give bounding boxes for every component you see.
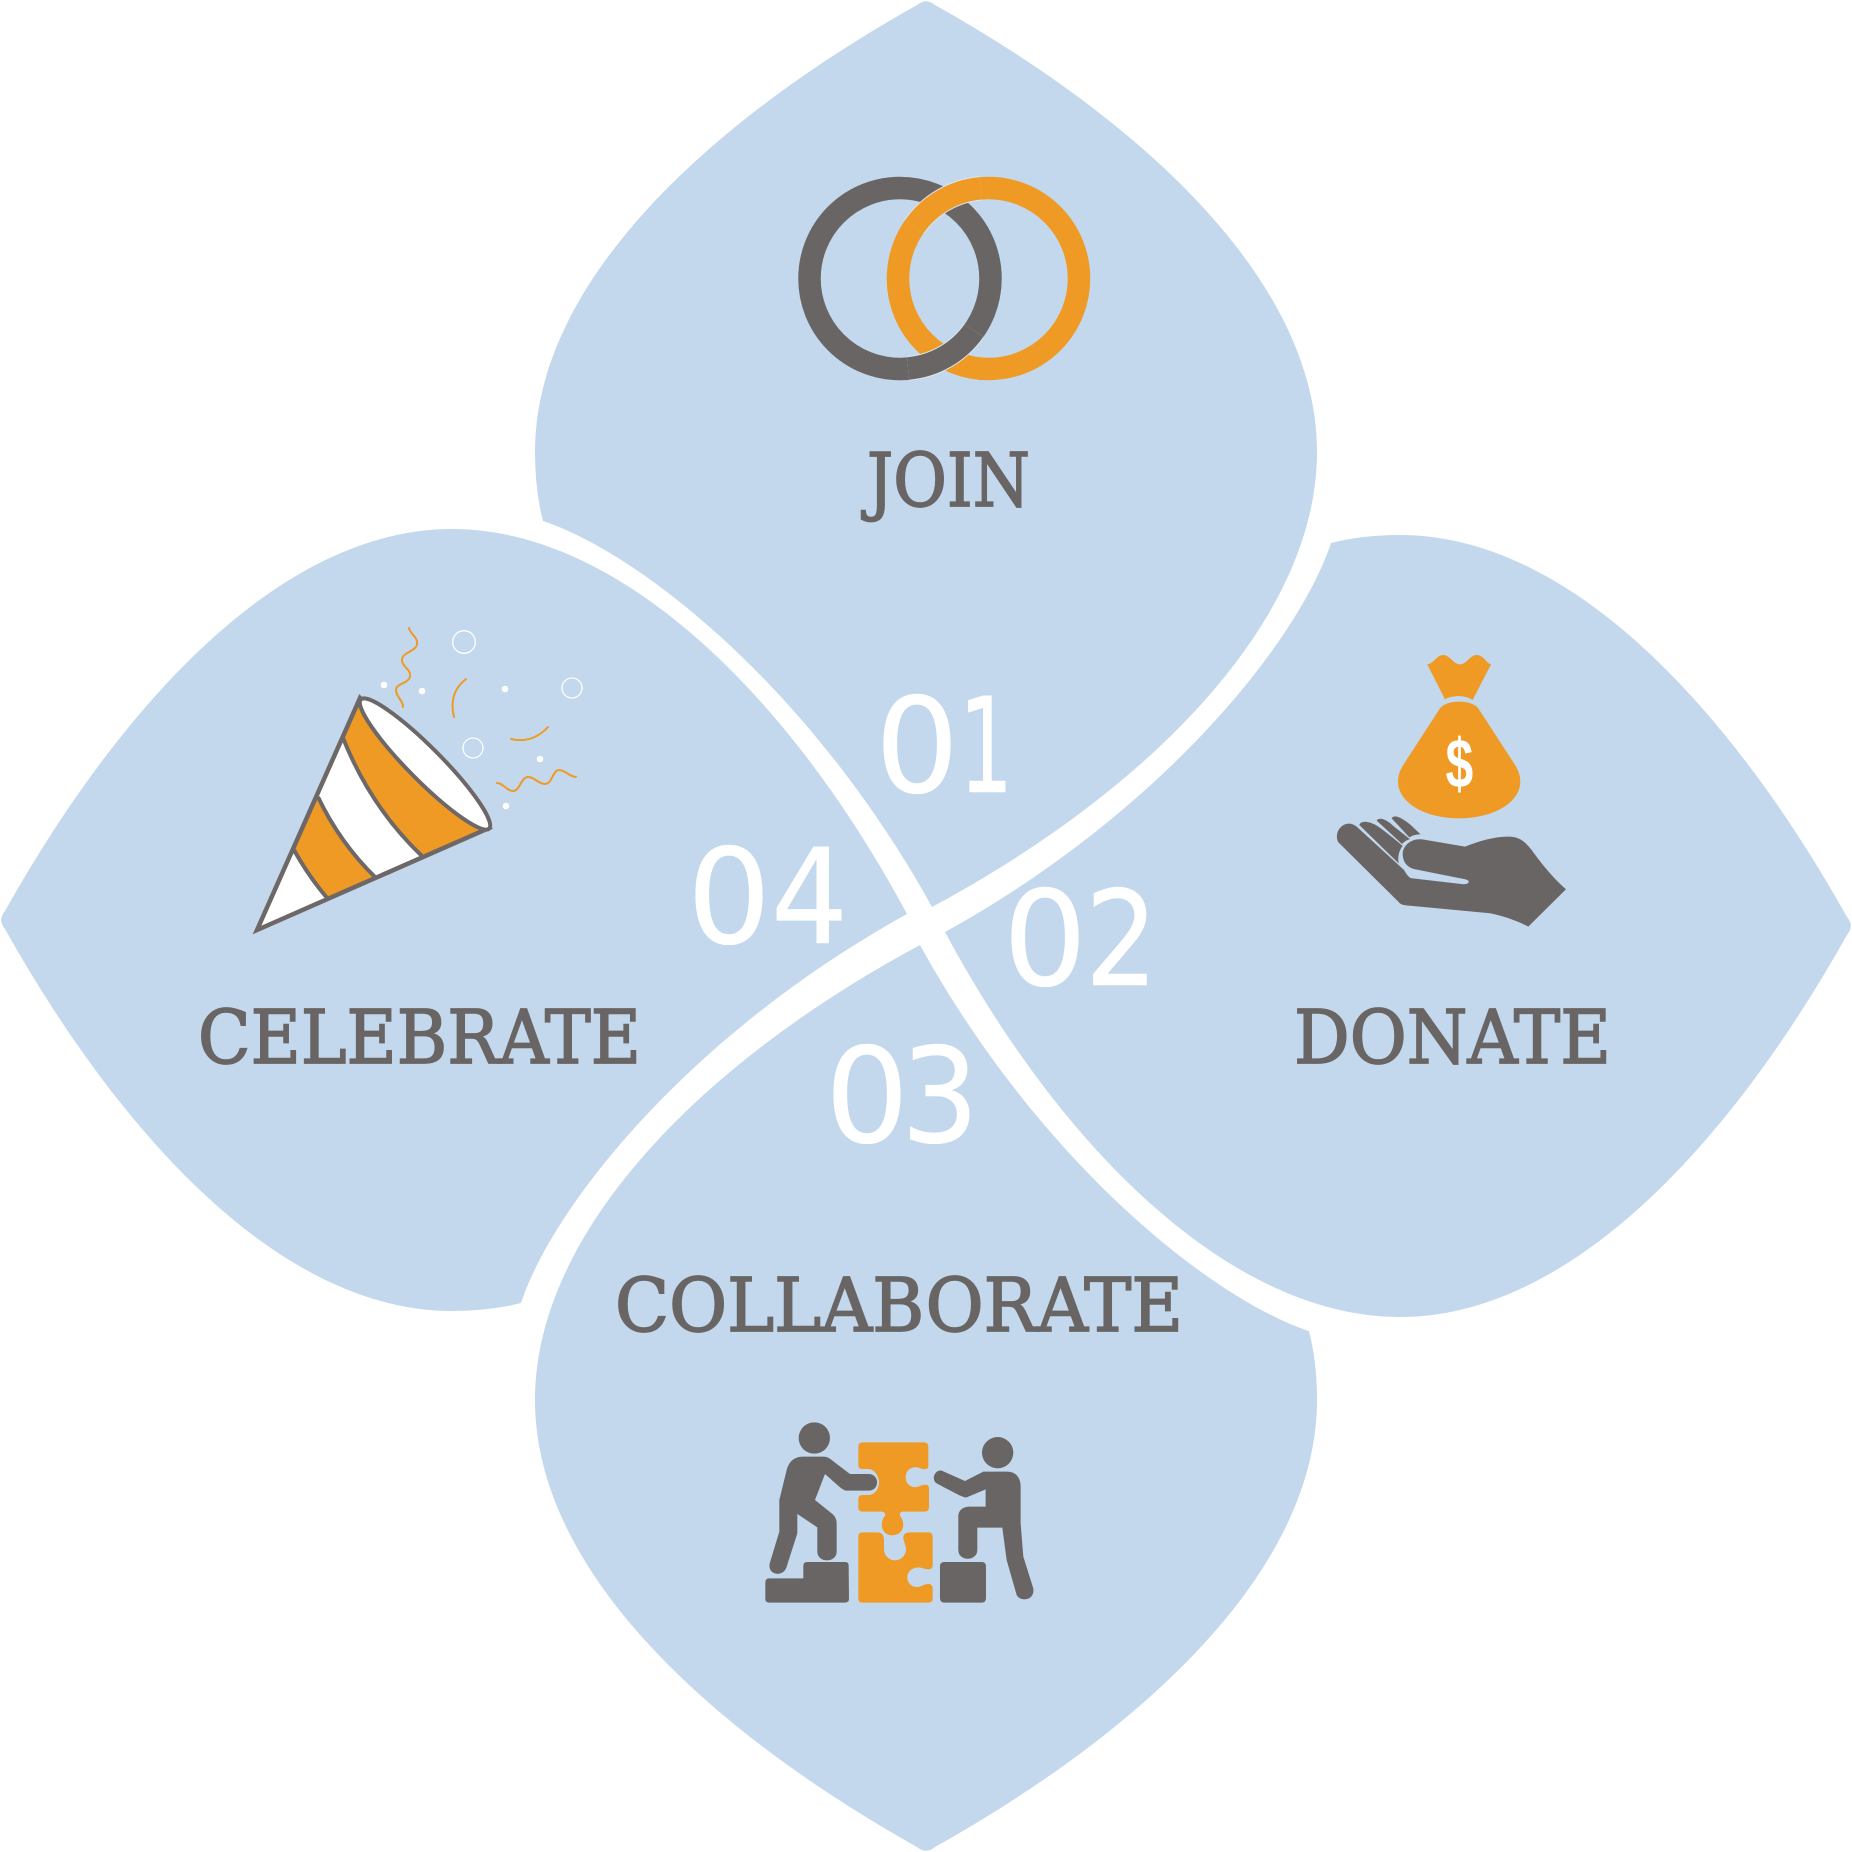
number: 02: 0 [1003, 863, 1087, 1017]
heading: CELEBRATE: CELEBRATE [198, 995, 641, 1081]
number: 04: 0 [687, 821, 771, 975]
bottom puzzle piece [858, 1532, 933, 1603]
heading: DONATE: DONATE [1294, 995, 1611, 1081]
number: 03: 0 [825, 1020, 909, 1174]
confetti dots [381, 682, 543, 809]
number: 03 [825, 1020, 979, 1174]
panel: top petal [535, 1, 1317, 907]
right person [934, 1437, 1033, 1599]
panel: bottom petal [535, 945, 1317, 1851]
number: 04: 4 [771, 821, 848, 975]
icon: party popper [257, 628, 582, 930]
cone [257, 698, 489, 930]
number: 03: 3 [901, 1020, 979, 1174]
heading: COLLABORATE: COLLABORATE [615, 1263, 1183, 1349]
number: 02: 2 [1085, 863, 1158, 1017]
top puzzle piece [858, 1442, 929, 1535]
number: 01 [875, 670, 1013, 824]
dollar sign: $ [1445, 725, 1473, 803]
icon: interlocking rings [810, 188, 1079, 369]
money bag neck [1427, 655, 1491, 700]
cone mouth [349, 688, 501, 840]
number: 01: 1 [959, 670, 1013, 824]
icon: hand holding money bag [1337, 655, 1566, 927]
panel: right petal [945, 535, 1851, 1317]
number: 04 [687, 821, 848, 975]
heading: JOIN: JOIN [861, 438, 1030, 524]
fingers [1359, 816, 1421, 867]
number: 02 [1003, 863, 1158, 1017]
icon: team assembling puzzle [765, 1422, 1033, 1603]
left stair block [765, 1562, 849, 1603]
right block [940, 1562, 986, 1603]
confetti rings [453, 631, 582, 758]
confetti streamers [396, 628, 576, 791]
number: 01: 0 [875, 670, 959, 824]
panel: left petal [1, 529, 907, 1311]
money bag body [1398, 702, 1520, 818]
left person [769, 1422, 877, 1574]
hand [1337, 824, 1566, 927]
cone stripes [294, 698, 489, 899]
